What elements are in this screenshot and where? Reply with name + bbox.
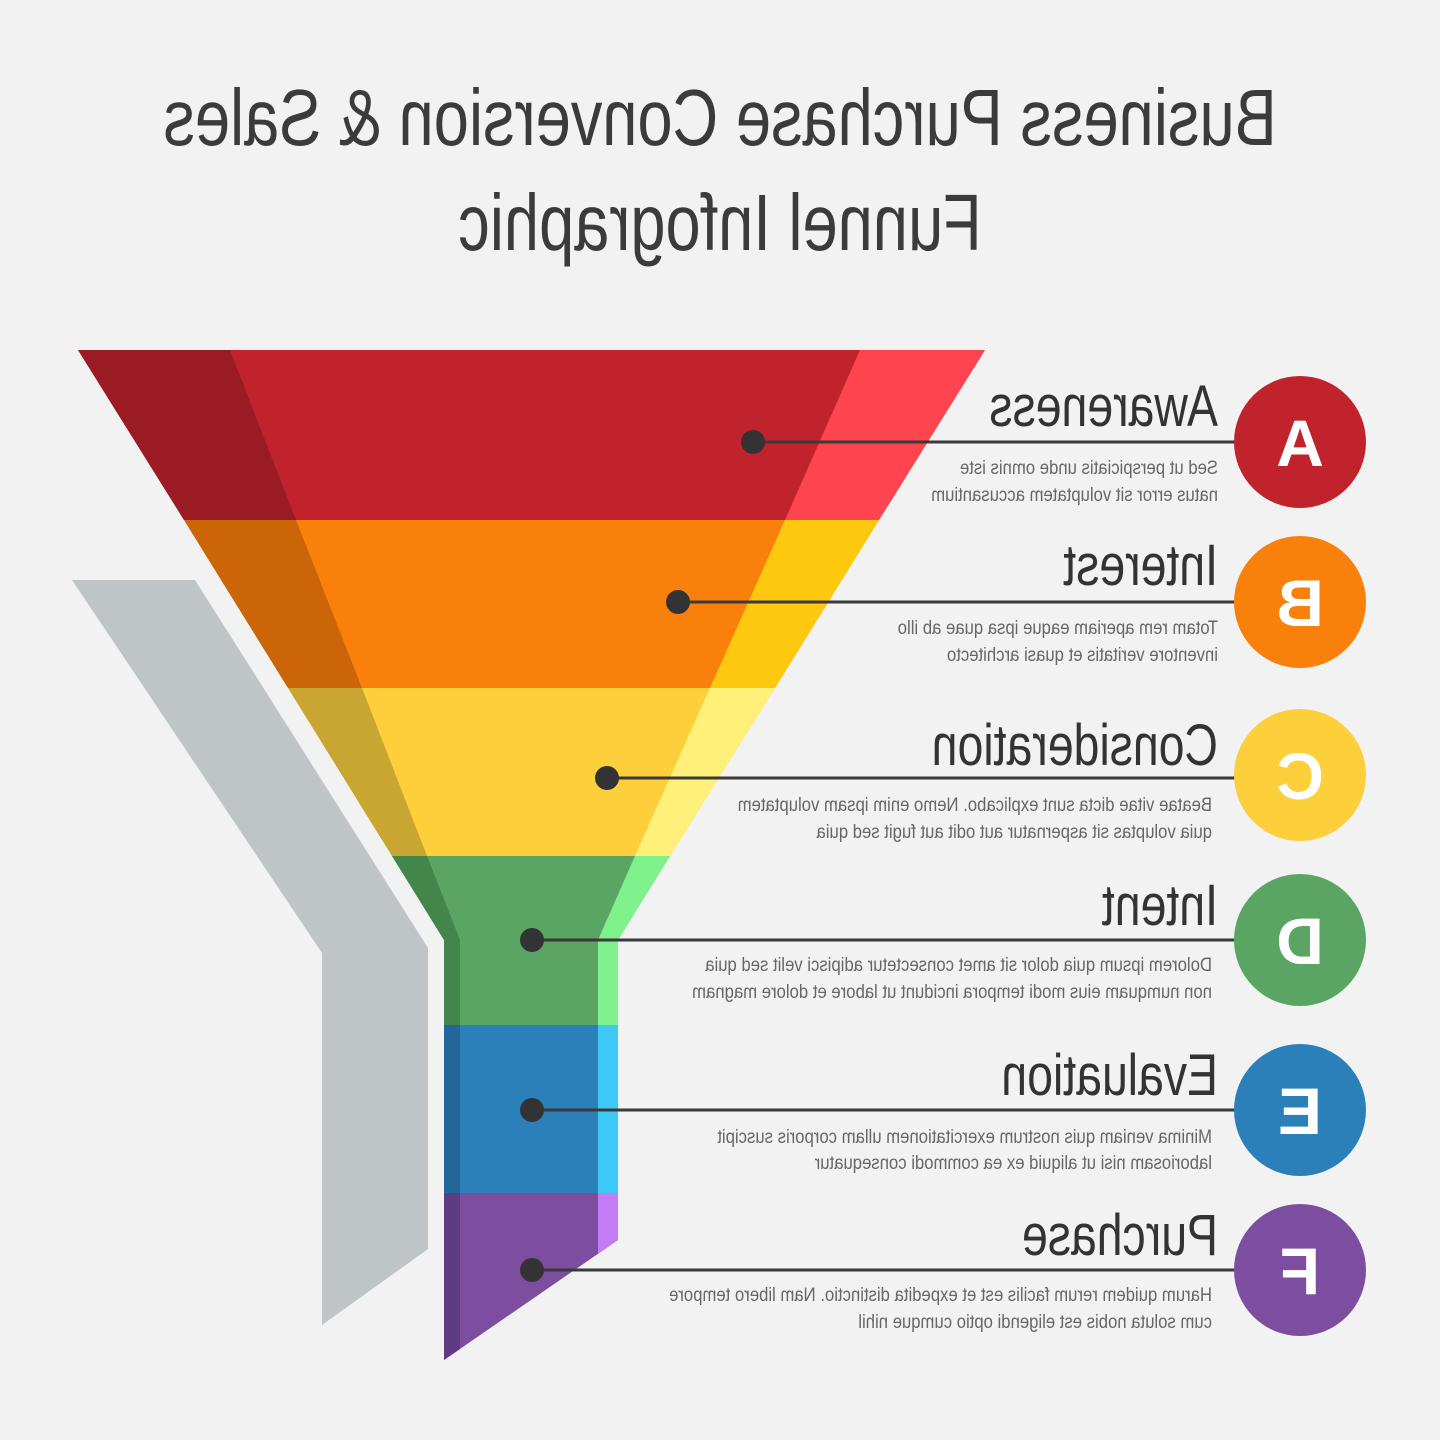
stage headings: Evaluation <box>1001 1043 1218 1108</box>
badge C <box>1234 709 1366 841</box>
title <box>163 74 1277 268</box>
badge F: F <box>1280 1234 1320 1308</box>
band: green intent <box>392 856 670 1025</box>
badge B: B <box>1276 566 1324 640</box>
badge B <box>1234 536 1366 668</box>
stage descriptions: cum soluta nobis est eligendi optio cumque nihil <box>858 1311 1212 1332</box>
stage headings <box>932 374 1218 1268</box>
badge A <box>1234 376 1366 508</box>
band: red awareness <box>78 350 985 520</box>
stage descriptions: Minima veniam quis nostrum exercitationem ullam corporis suscipit <box>717 1126 1212 1147</box>
stage descriptions <box>669 457 1218 1332</box>
funnel <box>78 350 985 1360</box>
stage descriptions: non numquam eius modi tempora incidunt ut labore et dolore magnam <box>692 981 1212 1002</box>
badge F <box>1234 1204 1366 1336</box>
band: purple purchase <box>444 1193 618 1360</box>
title: Funnel Infographic <box>458 179 982 268</box>
stage headings: Intent <box>1102 873 1218 938</box>
badge E: E <box>1278 1074 1322 1148</box>
stage descriptions: Beatae vitae dicta sunt explicabo. Nemo enim ipsam voluptatem <box>738 794 1212 815</box>
band: yellow consideration <box>288 688 775 856</box>
stage descriptions: inventore veritatis et quasi architecto <box>947 644 1218 665</box>
stage descriptions: Dolorem ipsum quia dolor sit amet consectetur adipisci velit sed quia <box>705 954 1212 975</box>
stage descriptions: natus error sit voluptatem accusantium <box>931 484 1218 505</box>
stage headings: Purchase <box>1022 1203 1218 1268</box>
badge C: C <box>1276 739 1324 813</box>
title: Business Purchase Conversion & Sales <box>163 74 1277 163</box>
badge E <box>1234 1044 1366 1176</box>
stage descriptions: quia voluptas sit aspernatur aut odit aut fugit sed quia <box>816 821 1212 842</box>
stage headings: Consideration <box>932 713 1218 778</box>
stage headings: Interest <box>1063 533 1218 598</box>
stage descriptions: Sed ut perspiciatis unde omnis iste <box>960 457 1218 478</box>
badge D: D <box>1276 904 1324 978</box>
circle badges <box>1234 376 1366 1336</box>
band: blue evaluation <box>444 1025 618 1193</box>
stage descriptions: laboriosam nisi ut aliquid ex ea commodi consequatur <box>815 1152 1212 1173</box>
stage descriptions: Harum quidem rerum facilis est et expedita distinctio. Nam libero tempore <box>669 1284 1212 1305</box>
connector lines and dots <box>520 430 1240 1282</box>
badge A: A <box>1276 406 1324 480</box>
stage headings: Awareness <box>989 374 1218 439</box>
gray shadow shape <box>72 580 428 1325</box>
badge D <box>1234 874 1366 1006</box>
stage descriptions: Totam rem aperiam eaque ipsa quae ab illo <box>898 617 1218 638</box>
band: orange interest <box>184 520 879 688</box>
